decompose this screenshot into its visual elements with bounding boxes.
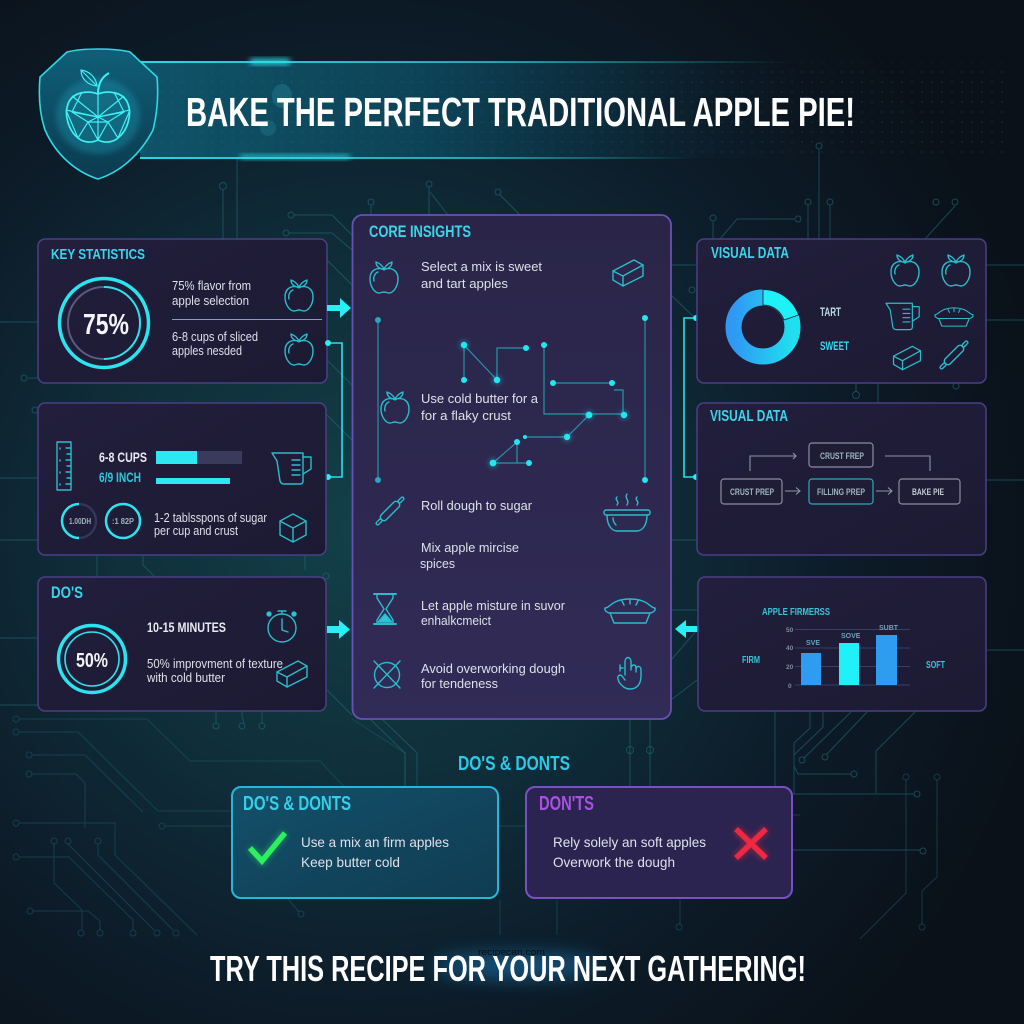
- bar chart: SVE: [806, 640, 820, 647]
- flow box: filling prep: [809, 479, 873, 504]
- ring: first measure: [62, 504, 96, 538]
- ring: second measure: [106, 504, 140, 538]
- heading: do's: DO'S: [51, 583, 83, 602]
- text: sugar line two: per cup and crust: [154, 524, 238, 538]
- panel: measures: [38, 403, 326, 555]
- icon: butter: [277, 661, 307, 687]
- circuit board traces: [0, 143, 1024, 939]
- bar chart: [786, 625, 910, 690]
- donut chart: [734, 290, 798, 356]
- arrow: firmness to core: [675, 620, 698, 638]
- stat: flavor line two: apple selection: [172, 294, 249, 308]
- source credit: recipecan.com: [478, 947, 545, 958]
- panel: don'ts box: [526, 787, 792, 898]
- flow box: bake pie: BAKE PIE: [912, 487, 944, 498]
- text: overwork: Overwork the dough: [553, 854, 675, 870]
- section heading: do's and don'ts: DO'S & DONTS: [458, 753, 570, 775]
- stat: flavor: 75% flavor from: [172, 279, 251, 293]
- panel: do's box: [232, 787, 498, 898]
- insight: avoid overworking: Avoid overworking dough: [421, 661, 565, 676]
- icon: sugar cube: [280, 514, 306, 542]
- panel: apple firmness chart: [698, 577, 986, 711]
- icon: cup: [886, 303, 919, 330]
- text: texture line two: with cold butter: [146, 671, 225, 685]
- icon: hourglass: [374, 594, 396, 624]
- flow box: crust prep: [721, 479, 782, 504]
- label: 6-8 cups: 6-8 CUPS: [99, 449, 147, 465]
- insight: mix spices: Mix apple mircise: [421, 540, 519, 555]
- icon: timer: [267, 611, 296, 642]
- flow box: filling prep: FILLING PREP: [817, 487, 865, 498]
- bar chart: 20: [786, 664, 794, 671]
- bar chart: SUBT: [879, 625, 899, 632]
- panel: visual data flow: [697, 403, 986, 555]
- stat: cups: 6-8 cups of sliced: [172, 330, 258, 344]
- flow box: bake pie: [899, 479, 960, 504]
- flow box: crust prep: CRUST PREP: [730, 487, 774, 498]
- text: texture: 50% improvment of texture: [147, 657, 283, 671]
- title banner: [140, 59, 1010, 159]
- arrow: do's to core: [327, 620, 350, 639]
- icon: apple: [370, 262, 398, 293]
- bar chart: 50: [786, 627, 794, 634]
- bar chart: SOVE: [841, 633, 861, 640]
- icon: butter: [894, 346, 920, 370]
- insight: cold butter line two: for a flaky crust: [421, 408, 511, 423]
- ring: second measure: :1 82P: [112, 517, 135, 526]
- stat: cups line two: apples nesded: [172, 344, 242, 358]
- arrow: key statistics to core: [327, 298, 351, 318]
- icon: measuring cup: [272, 453, 311, 484]
- text: rely: Rely solely an soft apples: [553, 834, 706, 850]
- icon: apple second: [381, 392, 409, 423]
- icon: apple: [285, 280, 313, 311]
- heading: DON'TS: [539, 793, 594, 815]
- insight: let apples rest: Let apple misture in suvor: [421, 598, 566, 613]
- icon: pie: [935, 308, 973, 326]
- ring: first measure: 1.00DH: [69, 517, 91, 526]
- bar: cups: [156, 451, 242, 464]
- flow box: crust prep top: [809, 443, 873, 467]
- shield apple logo: [39, 49, 158, 179]
- icon: crossed circle: [374, 661, 400, 688]
- insight: select apples: Select a mix is sweet: [421, 259, 542, 274]
- side rail: left: [375, 317, 381, 483]
- heading: visual data: VISUAL DATA: [710, 408, 788, 425]
- icon: red cross: [736, 829, 766, 858]
- heading: DO'S & DONTS: [243, 793, 351, 815]
- icon: butter: [613, 260, 643, 286]
- insight: cold butter: Use cold butter for a: [421, 391, 539, 406]
- side rail: right: [642, 315, 648, 483]
- legend: sweet: SWEET: [820, 339, 849, 353]
- footer glow: [432, 955, 602, 977]
- icon: ruler: [57, 442, 71, 490]
- label: minutes: 10-15 MINUTES: [147, 619, 226, 635]
- bar chart: 40: [786, 645, 794, 652]
- heading: visual data: VISUAL DATA: [711, 245, 789, 262]
- connector: right panels: [684, 315, 699, 480]
- icon: apple two: [942, 255, 970, 286]
- text: sugar: 1-2 tablsspons of sugar: [154, 511, 267, 525]
- chart title: APPLE FIRMERSS: [762, 606, 830, 618]
- icon: check mark: [250, 833, 285, 861]
- bar chart: 0: [788, 683, 792, 690]
- panel: key statistics: [38, 239, 327, 383]
- icon: rolling pin: [938, 339, 970, 371]
- axis label: firm: FIRM: [742, 654, 760, 666]
- axis label: soft: SOFT: [926, 659, 945, 671]
- panel: visual data donut: [697, 239, 986, 383]
- network diagram: [460, 341, 628, 467]
- icon: apple one: [891, 255, 919, 286]
- ring chart 75%: [60, 278, 148, 368]
- icon: rolling pin: [374, 495, 406, 527]
- panel: do's: [38, 577, 326, 711]
- insight: avoid overworking line two: for tendeness: [421, 676, 498, 691]
- ring chart 50%: 50%: [76, 650, 108, 672]
- flow arrows: [750, 453, 930, 494]
- heading: key statistics: KEY STATISTICS: [51, 246, 145, 263]
- icon: pie: [605, 599, 655, 623]
- ring chart 75%: 75%: [83, 309, 129, 341]
- icon: steaming bowl: [604, 494, 650, 531]
- ring chart 50%: [58, 626, 126, 692]
- text: use a mix: Use a mix an firm apples: [301, 834, 449, 850]
- connector: statistics to measures: [325, 340, 342, 480]
- insight: mix spices line two: spices: [420, 556, 455, 571]
- insight: roll dough: Roll dough to sugar: [421, 498, 533, 513]
- icon: apple second: [285, 334, 313, 365]
- icon: hand: [618, 658, 641, 689]
- flow box: crust prep top: CRUST FREP: [820, 451, 864, 462]
- heading: core insights: CORE INSIGHTS: [369, 222, 471, 241]
- text: keep butter: Keep butter cold: [301, 854, 400, 870]
- legend: tart: TART: [820, 305, 841, 319]
- label: 6/9 inch: 6/9 INCH: [99, 469, 141, 485]
- panel: core insights: [352, 215, 671, 719]
- insight: select apples line two: and tart apples: [421, 276, 508, 291]
- insight: let apples rest line two: enhalkcmeict: [421, 613, 491, 628]
- bar: inch: [156, 478, 230, 484]
